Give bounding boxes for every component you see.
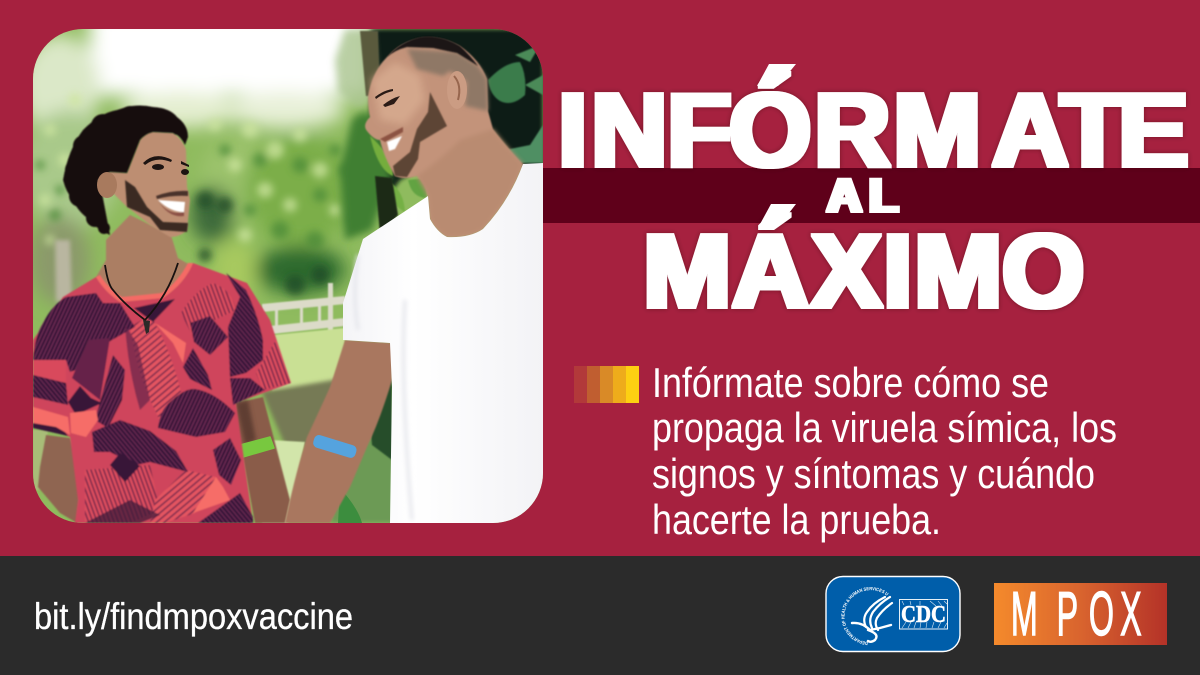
title: INFÓRMATE — [558, 72, 1189, 190]
accent marks — [757, 64, 796, 226]
dark tree, upper right — [335, 29, 543, 240]
tree trunk left — [55, 240, 72, 302]
left man: arms — [38, 397, 290, 523]
footer url: bit.ly/findmpoxvaccine — [34, 596, 353, 637]
foliage texture — [35, 93, 363, 295]
left man: moustache and mouth — [156, 191, 188, 216]
right man: hair crown — [387, 36, 478, 66]
body text: propaga la viruela símica, los — [652, 404, 1117, 451]
body text: signos y síntomas y cuándo — [652, 450, 1095, 497]
right man: beard — [393, 92, 447, 177]
gradient stripes icon — [574, 366, 639, 403]
right man: arm — [285, 340, 392, 523]
left man: beard — [125, 180, 188, 232]
title — [558, 72, 1189, 330]
circular HHS seal text: DEPARTMENT OF HEALTH & HUMAN SERVICES USA — [841, 587, 889, 646]
fence — [261, 282, 345, 334]
right man: eye and brow — [375, 89, 400, 107]
left man: curly hair — [63, 106, 188, 235]
necklace with pendant — [105, 263, 178, 334]
title: al: AL — [827, 170, 898, 223]
title second line: MÁXIMO — [643, 212, 1084, 330]
left man: face — [110, 132, 190, 237]
left man: patterned shirt — [33, 263, 291, 523]
body text: hacerte la prueba. — [652, 496, 941, 543]
icon: HHS eagle — [852, 597, 892, 642]
grass and lower garden — [33, 328, 395, 523]
footer bar — [0, 556, 1200, 675]
CDC box: CDC — [901, 602, 946, 628]
left man: eyes and brows — [143, 156, 189, 175]
body text — [652, 359, 1117, 543]
green bandage — [240, 437, 274, 457]
right man: neck and head — [365, 37, 523, 237]
left man: ear — [97, 172, 117, 198]
MPOX logo: MPOX — [1011, 580, 1142, 649]
right man: hair fade — [407, 49, 488, 111]
right man: smile — [380, 127, 403, 151]
CDC HHS logo — [825, 576, 961, 652]
blue bandage — [313, 435, 356, 458]
body text: Infórmate sobre cómo se — [652, 359, 1049, 406]
photo: two smiling men with vaccination bandages — [20, 10, 543, 523]
right man: ear — [447, 71, 467, 109]
left man: neck and chest — [96, 215, 190, 302]
dark title band — [543, 168, 1200, 223]
right man: white t-shirt — [343, 163, 543, 523]
